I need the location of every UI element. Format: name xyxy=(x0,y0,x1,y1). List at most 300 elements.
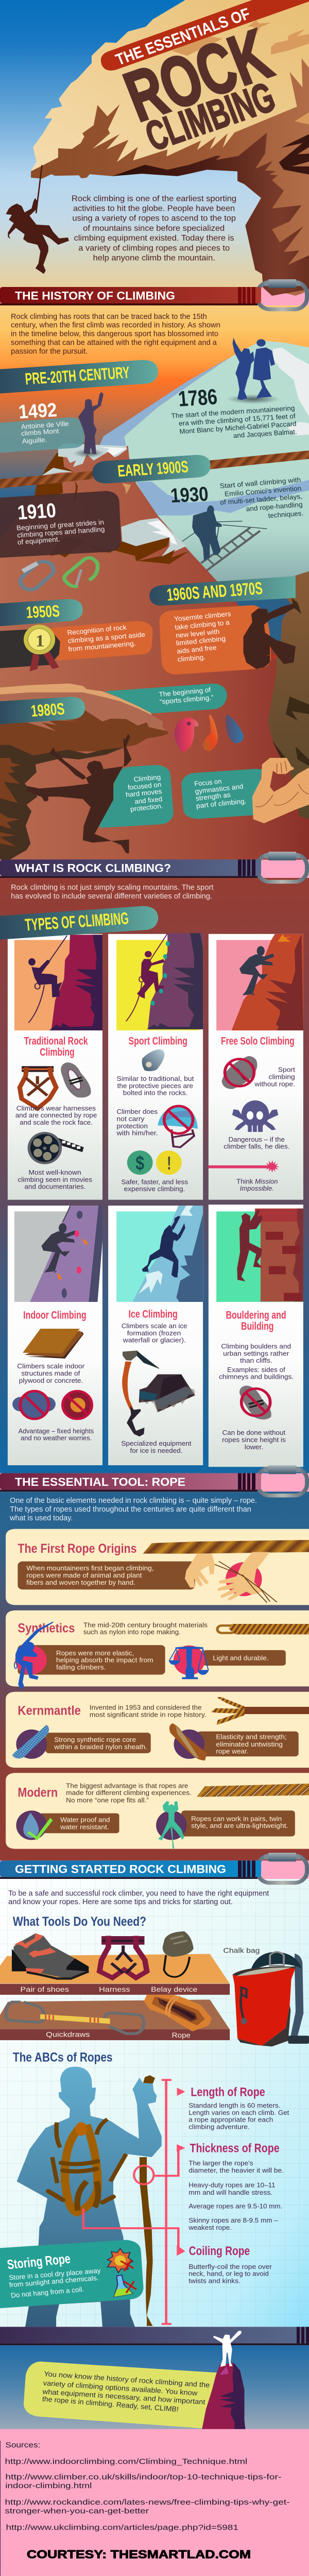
length of rope: Length varies on each climb. Get xyxy=(188,2109,289,2116)
card title: Climbing xyxy=(40,1046,75,1058)
description: Invented in 1953 and considered the xyxy=(90,1704,202,1711)
card image xyxy=(216,1209,303,1302)
panel: yosemite climbers: Yosemite climbers xyxy=(174,611,231,623)
panel: 1910 xyxy=(0,491,121,558)
icon: rope coil xyxy=(61,1062,91,1097)
icon: skull xyxy=(232,1100,278,1132)
text: sport: Climber does xyxy=(117,1108,158,1115)
icon: dollar xyxy=(127,1150,153,1175)
heading: Kernmantle xyxy=(18,1703,81,1718)
background: rope section xyxy=(0,1492,309,1860)
box: elasticity xyxy=(197,1732,299,1756)
background: sky gradient xyxy=(0,0,309,287)
ice text xyxy=(121,1322,192,1454)
rope intro text: The types of ropes used throughout the centuries are quite different than xyxy=(10,1505,251,1514)
getting started text: and know your ropes. Here are some tips and tricks for starting out. xyxy=(8,1898,233,1906)
climber silhouette on rope xyxy=(6,165,69,274)
panel: recognition with medal: climbing as a sport aside xyxy=(67,631,146,645)
description xyxy=(90,1704,207,1718)
intro text: activities to hit the globe. People have been xyxy=(73,204,235,213)
panel: yosemite climbers: take climbing to a xyxy=(175,619,230,632)
rope intro text: One of the basic elements needed in rock climbing is – quite simply – rope. xyxy=(10,1497,257,1505)
what is rock climbing text: Rock climbing is not just simply scaling mountains. The sport xyxy=(11,884,214,892)
icon: ice axe xyxy=(122,1350,159,1436)
text: traditional: and documentaries. xyxy=(24,1183,85,1190)
background: grid lines xyxy=(0,1879,309,2327)
rope xyxy=(143,1540,309,1554)
panel: storing rope xyxy=(0,2240,144,2308)
background: types of climbing section xyxy=(0,878,309,1473)
heading text: WHAT IS ROCK CLIMBING? xyxy=(15,861,171,875)
panel: kernmantle xyxy=(6,1692,309,1768)
description: such as nylon into rope making. xyxy=(83,1628,181,1636)
icon: film reel xyxy=(28,1132,84,1164)
card: ice climbing xyxy=(108,1206,203,1465)
card image xyxy=(116,1206,203,1302)
text: sport: with him/her. xyxy=(116,1129,158,1137)
bouldering text: Climbing boulders and xyxy=(221,1343,291,1350)
indoor title: Indoor Climbing xyxy=(23,1309,87,1321)
heading: what tools do you need: What Tools Do You Need? xyxy=(13,1914,146,1928)
staff xyxy=(140,2157,153,2326)
description: No more “one rope fits all.” xyxy=(66,1797,149,1804)
icon: crossed-out cloud xyxy=(12,1391,56,1419)
panel: recognition with medal xyxy=(0,621,153,671)
callouts: 1980s: Focus on xyxy=(194,778,222,788)
card text: without rope. xyxy=(254,1080,295,1088)
callouts: 1980s: and fixed xyxy=(134,795,163,806)
callouts: 1980s: gymnastics and xyxy=(194,783,244,795)
coiling rope: Coiling Rope xyxy=(189,2244,250,2258)
hands twisting fibres xyxy=(185,1552,277,1603)
card row 1 contents lower xyxy=(15,1100,289,1193)
closing callout xyxy=(24,2362,221,2429)
timeline banner: pre-20th century: PRE-20TH CENTURY xyxy=(24,363,130,388)
panel: modern: Ropes can work in pairs, twin xyxy=(191,1815,282,1822)
description xyxy=(66,1782,192,1804)
icon: rope coil xyxy=(144,1995,212,2031)
icon: exclamation: ! xyxy=(167,1153,171,1174)
background: final section xyxy=(0,2345,309,2429)
text: traditional: and scale the rock face. xyxy=(20,1119,93,1126)
bouldering text: chimneys and buildings. xyxy=(219,1373,294,1380)
courtesy line: COURTESY: THESMARTLAD.COM xyxy=(27,2549,251,2561)
ice text: Specialized equipment xyxy=(121,1439,192,1447)
icon: flexed arm xyxy=(252,758,309,823)
intro text: using a variety of ropes to ascend to the top xyxy=(72,213,236,223)
bouldering title: Building xyxy=(241,1320,274,1333)
card: free solo climbing xyxy=(209,934,303,1200)
indoor text: Advantage – fixed heights xyxy=(19,1427,94,1435)
text: free solo: Dangerous – if the xyxy=(228,1136,285,1143)
panel: kernmantle: eliminated untwisting xyxy=(216,1740,283,1748)
heading: The First Rope Origins xyxy=(18,1541,137,1555)
text: free solo: climber falls, he dies. xyxy=(224,1143,289,1150)
card image xyxy=(116,933,203,1030)
illustration: climber from behind with rope and staff xyxy=(17,2066,162,2327)
panel: synthetics: helping absorb the impact from xyxy=(56,1656,153,1664)
section header: getting started rock climbing xyxy=(0,1853,307,1883)
getting started text xyxy=(8,1889,269,1906)
1786 text block: and Jacques Balmat. xyxy=(233,428,297,440)
icon: harness xyxy=(99,1936,147,1978)
figure waving at 1492: climbs Mont xyxy=(21,428,59,437)
panel: synthetics: Ropes were more elastic, xyxy=(56,1649,134,1657)
closing callout: what equipment is necessary, and how important xyxy=(42,2388,206,2406)
text: traditional xyxy=(15,1105,97,1190)
banner: the essentials of xyxy=(101,0,309,71)
bouldering text: ropes since height is xyxy=(222,1436,286,1444)
1786 text block: 1786 xyxy=(177,385,218,412)
icon: dollar: $ xyxy=(135,1153,144,1174)
icon: crossed-out rope xyxy=(221,1056,258,1089)
label: chalk bag: Chalk bag xyxy=(224,1947,260,1955)
card title xyxy=(24,1035,88,1058)
icon: chalk bag xyxy=(233,1952,309,2046)
length of rope: a rope appropriate for each xyxy=(188,2116,273,2123)
length of rope: Standard length is 60 meters. xyxy=(188,2102,281,2109)
rope intro text: what is used today. xyxy=(9,1514,73,1522)
callouts: 1980s: part of climbing. xyxy=(196,798,247,810)
icon: rope section xyxy=(169,1723,207,1760)
rope intro text xyxy=(9,1497,257,1522)
panel: kernmantle: Elasticity and strength; xyxy=(216,1733,287,1740)
panel: synthetics xyxy=(6,1611,309,1690)
length of rope: Length of Rope xyxy=(191,2084,265,2099)
box: elastic xyxy=(18,1645,165,1675)
sources panel: indoor-climbing.html xyxy=(5,2482,92,2490)
card: indoor climbing xyxy=(8,1206,102,1465)
icon: scales xyxy=(169,1647,209,1679)
panel: storing rope: Store in a cool dry place away xyxy=(9,2267,101,2282)
history intro text: Rock climbing has roots that can be traced back to the 15th xyxy=(11,312,207,320)
icon: laser xyxy=(209,1160,280,1173)
icon: blue climber xyxy=(14,1622,53,1690)
icon: water drop with check xyxy=(23,1812,53,1840)
panel: synthetics: falling climbers. xyxy=(56,1664,106,1671)
rope facts xyxy=(188,2084,289,2284)
description xyxy=(83,1621,208,1636)
heading text: THE HISTORY OF CLIMBING xyxy=(15,289,175,302)
intro text xyxy=(72,194,236,262)
ice text: for ice is needed. xyxy=(130,1447,182,1454)
panel: the first rope origins: ropes were made of animal and plant xyxy=(26,1571,142,1579)
thickness of rope: Skinny ropes are 8-9.5 mm – xyxy=(188,2216,278,2224)
text: traditional: Climbers wear harnesses xyxy=(16,1105,96,1112)
panel: kernmantle: rope wear. xyxy=(216,1748,249,1755)
icon: belay device xyxy=(163,1931,194,1977)
teal label: 1492 xyxy=(0,392,105,458)
coiling rope xyxy=(188,2244,272,2284)
panel: modern: style, and are ultra-lightweight. xyxy=(191,1822,288,1829)
thickness of rope xyxy=(188,2141,284,2231)
icon: braided core xyxy=(12,1725,49,1758)
callouts: 1980s xyxy=(26,684,309,853)
timeline banner: early 1900s: EARLY 1900S xyxy=(117,457,189,480)
heading text: THE ESSENTIAL TOOL: ROPE xyxy=(15,1476,185,1488)
text box xyxy=(18,1562,195,1589)
heading text: GETTING STARTED ROCK CLIMBING xyxy=(15,1862,226,1876)
panel: storing rope: Storing Rope xyxy=(6,2251,72,2273)
shelf: shoes, harness, belay device: Pair of shoes xyxy=(20,1986,69,1993)
1930 text and ladder climber: 1930 xyxy=(169,483,209,507)
bouldering text xyxy=(219,1343,294,1451)
card text xyxy=(117,1075,194,1096)
card text: the protective pieces are xyxy=(117,1082,193,1090)
icon: gold medal: 1 xyxy=(36,631,44,650)
figure waving at 1492: Antoine de Ville xyxy=(21,420,69,431)
callouts: 1980s: protection. xyxy=(130,803,164,814)
description: made for different climbing experiences. xyxy=(66,1789,192,1797)
card: bouldering and building xyxy=(209,1205,303,1467)
sources panel: http://www.ukclimbing.com/articles/page.php?id=5981 xyxy=(6,2523,238,2532)
timeline banner: 1980s xyxy=(0,697,85,724)
card text: Similar to traditional, but xyxy=(117,1075,194,1082)
bouldering text: urban settings rather xyxy=(223,1350,289,1357)
thickness of rope: weakest rope. xyxy=(188,2224,232,2231)
callouts: 1980s: The beginning of xyxy=(159,686,212,699)
closing callout: You now know the history of rock climbing and the xyxy=(44,2370,210,2389)
text: sport: Safer, faster, and less xyxy=(121,1178,188,1185)
ice text: waterfall or glacier). xyxy=(123,1336,186,1344)
thickness of rope: diameter, the heavier it will be. xyxy=(188,2166,284,2174)
callouts: 1980s: Climbing xyxy=(133,774,161,784)
rope with eye xyxy=(217,1624,309,1634)
climber on cliff xyxy=(244,603,296,669)
ice text: formation (frozen xyxy=(127,1329,181,1337)
bouldering text: than cliffs. xyxy=(240,1357,272,1364)
what is rock climbing text: has evolved to include several different varieties of climbing. xyxy=(11,892,212,901)
panel: 1910: climbing ropes and handling xyxy=(17,526,105,539)
box: core xyxy=(45,1733,151,1753)
background: sunset gradient xyxy=(0,306,309,859)
callouts: 1980s: hard moves xyxy=(125,788,162,799)
icons: carabiners xyxy=(16,558,98,593)
panel: yosemite climbers: limited climbing xyxy=(176,635,226,648)
callouts: 1980s: “sports climbing.” xyxy=(159,694,214,706)
illustration: rock overhang xyxy=(31,0,309,296)
cliff on right xyxy=(268,571,309,819)
thickness of rope: The larger the rope's xyxy=(188,2159,253,2167)
text: sport xyxy=(116,1108,188,1193)
icon: crampon boot xyxy=(139,1374,195,1412)
icon: harness xyxy=(20,1066,56,1109)
icon: quickdraws xyxy=(6,2002,144,2033)
panel: the first rope origins: fibers and woven together by hand. xyxy=(26,1579,135,1586)
shelf: shoes, harness, belay device xyxy=(0,1931,230,1995)
coiling rope: twists and kinks. xyxy=(188,2277,241,2284)
rope across timeline xyxy=(0,450,309,488)
panel: yosemite climbers: climbing. xyxy=(177,654,206,664)
sources panel: http://www.rockandice.com/lates-news/free-climbing-tips-why-get- xyxy=(5,2498,289,2506)
timeline banner: 1950s xyxy=(0,599,83,626)
panel: 1910: 1910 xyxy=(16,499,57,524)
sources panel: Sources: xyxy=(5,2441,40,2449)
heading: Synthetics xyxy=(18,1621,75,1635)
history intro text xyxy=(11,312,220,355)
icon: plywood xyxy=(23,1329,84,1359)
icon: crossed-out flask xyxy=(114,2275,136,2297)
coiling rope: neck, hand, or leg to avoid xyxy=(188,2270,269,2277)
card: traditional rock climbing xyxy=(8,934,102,1200)
section header: the history of climbing xyxy=(0,279,307,309)
length of rope xyxy=(188,2084,289,2130)
card text xyxy=(254,1066,295,1088)
row 2 card contents xyxy=(12,1308,294,1454)
icon: crossed-out helmet xyxy=(158,1106,198,1147)
box: pairs xyxy=(181,1810,295,1836)
1786 text block xyxy=(171,385,297,440)
rope xyxy=(197,1784,309,1797)
panel: 1910: of equipment. xyxy=(17,536,60,547)
intro text: climbing equipment existed. Today there is xyxy=(74,233,234,243)
shelf: shoes, harness, belay device: Belay device xyxy=(151,1986,197,1993)
length of rope: climbing adventure. xyxy=(188,2123,250,2130)
background: getting started section xyxy=(0,1879,309,2327)
panel: recognition with medal: Recognition of rock xyxy=(67,624,127,637)
box: light and durable xyxy=(203,1650,286,1666)
sources panel xyxy=(0,2429,309,2576)
panel: 1910: Beginning of great strides in xyxy=(16,519,105,532)
description: The biggest advantage is that ropes are xyxy=(66,1782,188,1789)
panel: storing rope: Do not hang from a coil. xyxy=(10,2286,84,2299)
ice text: Climbers scale an ice xyxy=(122,1322,187,1330)
timeline banner: pre-20th century xyxy=(0,360,158,394)
text: sport: not carry xyxy=(117,1115,144,1123)
coiled rope xyxy=(65,2125,98,2213)
mountain: red peak xyxy=(0,444,309,860)
panel: the first rope origins: When mountaineers first began climbing, xyxy=(26,1564,153,1572)
icon: crossed-out sun xyxy=(63,1391,92,1419)
heading: the abcs of ropes: The ABCs of Ropes xyxy=(13,2050,112,2064)
indoor text: structures made of xyxy=(21,1369,80,1377)
intro text: a variety of climbing ropes and pieces to xyxy=(78,243,230,252)
text: free solo xyxy=(224,1136,289,1192)
shelf: quickdraws and rope: Quickdraws xyxy=(46,2031,90,2039)
1786 pair of figures xyxy=(227,337,280,404)
icon: gold medal xyxy=(24,625,59,671)
callouts: 1980s: focused on xyxy=(127,781,162,792)
intro text: help anyone climb the mountain. xyxy=(93,253,215,262)
text: free solo: Think Mission xyxy=(236,1178,278,1185)
card title: Sport Climbing xyxy=(128,1035,187,1047)
panel: yosemite climbers: aids and free xyxy=(176,644,217,655)
heading: Modern xyxy=(18,1785,58,1800)
figure waving at 1492: Aiguille. xyxy=(22,436,47,446)
ice title: Ice Climbing xyxy=(128,1308,178,1320)
section header: what is rock climbing xyxy=(0,852,307,882)
intro text: Rock climbing is one of the earliest sporting xyxy=(72,194,236,203)
icon: crossed-out sun xyxy=(108,2248,133,2273)
shelf: quickdraws and rope: Rope xyxy=(172,2031,191,2040)
panel: modern: Water proof and xyxy=(60,1816,110,1823)
panel: modern: water resistant. xyxy=(60,1823,109,1831)
harness straps xyxy=(52,2119,126,2183)
panel: kernmantle: within a braided nylon sheath. xyxy=(54,1743,147,1751)
banner: types of climbing: TYPES OF CLIMBING xyxy=(24,909,129,935)
measuring lines xyxy=(83,2080,185,2324)
coiling rope: Butterfly-coil the rope over xyxy=(188,2263,272,2270)
icon: climbing holds xyxy=(175,714,244,752)
thickness of rope: Average ropes are 9.5-10 mm. xyxy=(188,2202,282,2210)
closing callout: variety of climbing options available. You know xyxy=(43,2379,198,2397)
shelf: quickdraws and rope xyxy=(0,1995,230,2040)
card text: Sport xyxy=(278,1066,295,1073)
text: sport: expensive climbing. xyxy=(124,1185,185,1193)
sources panel: http://www.indoorclimbing.com/Climbing_Technique.html xyxy=(5,2458,247,2466)
text: traditional: climbing seen in movies xyxy=(18,1176,92,1183)
icon: crossed-out rope xyxy=(239,1385,271,1419)
description: The mid-20th century brought materials xyxy=(83,1621,208,1629)
body xyxy=(17,2066,162,2327)
card image xyxy=(14,935,102,1030)
card text: bolted into the rocks. xyxy=(123,1089,187,1096)
callouts: 1980s: strength as xyxy=(195,791,231,803)
icon: grey hold xyxy=(142,1049,165,1071)
title: rock climbing xyxy=(115,15,281,160)
history intro text: something that can be attained with the right equipment and a xyxy=(11,338,217,347)
card: sport climbing xyxy=(108,933,203,1200)
panel: recognition with medal: from mountaineering. xyxy=(68,640,136,653)
indoor text xyxy=(17,1363,94,1442)
card title: Traditional Rock xyxy=(24,1035,88,1047)
thickness of rope: mm and will handle stress. xyxy=(188,2189,272,2196)
panel: storing rope: from sunlight and chemicals. xyxy=(9,2275,99,2289)
section header: the essential tool rope xyxy=(0,1465,307,1496)
closing band xyxy=(0,2327,309,2345)
icon: pair of shoes xyxy=(12,1934,89,1978)
illustration: summit and victorious climber xyxy=(202,2331,245,2429)
panel: kernmantle: Strong synthetic rope core xyxy=(54,1736,136,1743)
figure waving at 1492 xyxy=(18,392,105,458)
icon: exclamation xyxy=(156,1150,182,1175)
box: water proof xyxy=(40,1814,119,1833)
history intro text: century, when the first climb was recorded in history. As shown xyxy=(11,321,220,329)
indoor text: plywood or concrete. xyxy=(19,1377,83,1384)
panel: modern xyxy=(6,1773,309,1849)
what is rock climbing text xyxy=(11,884,214,901)
history intro text: passion for the pursuit. xyxy=(11,347,88,355)
mountains: mint peak, river, snow xyxy=(98,337,309,590)
intro text: of mountains since before specialized xyxy=(83,224,225,232)
timeline banner: early 1900s xyxy=(92,455,211,483)
timeline banner: 1980s: 1980S xyxy=(30,700,65,720)
shelf: shoes, harness, belay device: Harness xyxy=(99,1986,130,1993)
text: sport: protection xyxy=(117,1122,148,1130)
bouldering text: Can be done without xyxy=(222,1429,285,1436)
indoor text: and no weather worries. xyxy=(21,1434,92,1442)
indoor text: Climbers scale indoor xyxy=(17,1363,84,1370)
text: traditional: Most well-known xyxy=(28,1168,81,1176)
bouldering text: Examples: sides of xyxy=(227,1366,285,1373)
history intro text: in the timeline below, this dangerous sport has blossomed into xyxy=(11,330,218,338)
panel: yosemite climbers xyxy=(159,603,296,674)
panel: the first rope origins xyxy=(6,1529,309,1605)
card image xyxy=(14,1206,102,1302)
text: free solo: Impossible. xyxy=(240,1184,274,1192)
figure waving at 1492: 1492 xyxy=(18,399,58,422)
timeline banner: 1950s: 1950S xyxy=(26,602,60,622)
closing callout: the rope is in climbing. Ready, set, CLIMB! xyxy=(42,2395,179,2414)
panel: yosemite climbers: new level with xyxy=(175,628,220,639)
card image xyxy=(216,934,303,1030)
1930 text and ladder climber xyxy=(169,477,304,570)
text: traditional: and are connected by rope xyxy=(15,1111,97,1119)
sources panel: stronger-when-you-can-get-better xyxy=(5,2507,149,2515)
icon: green climber xyxy=(158,1801,184,1849)
illustration: 1980s rock and climber xyxy=(0,684,168,860)
banner: types of climbing xyxy=(0,906,158,940)
